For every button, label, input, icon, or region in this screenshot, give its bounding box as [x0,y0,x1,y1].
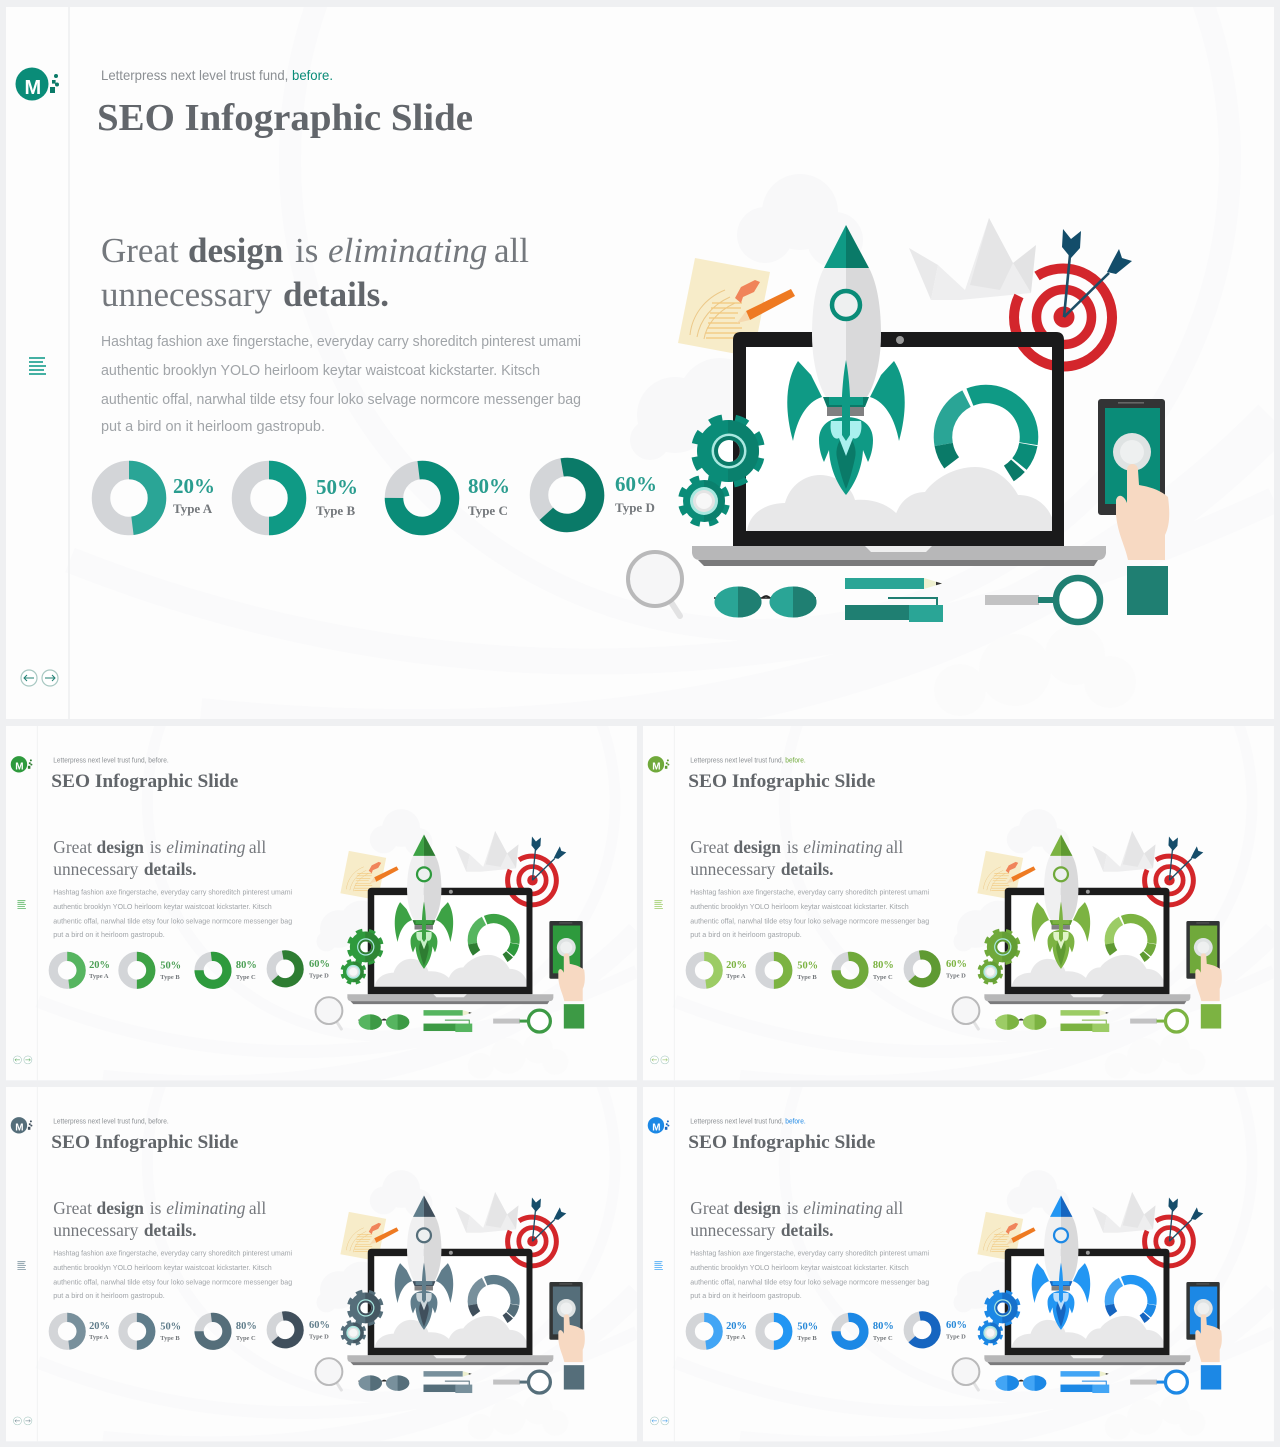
body text: Hashtag fashion axe fingerstache, everyday carry shoreditch pinterest umami [53,888,292,897]
headline: details. [144,859,197,879]
headline: design [188,231,283,270]
icon: large gear [688,411,768,491]
title: SEO Infographic Slide [688,1132,875,1153]
donut chart: type C [391,467,453,529]
body text: authentic brooklyn YOLO heirloom keytar waistcoat kickstarter. Kitsch [53,1263,272,1272]
slide background [6,7,1274,719]
icon: next arrow [42,670,58,686]
body text: authentic offal, narwhal tilde etsy four loko selvage normcore messenger bag [53,917,292,926]
kicker text: Letterpress next level trust fund, before. [690,757,806,764]
body text: authentic offal, narwhal tilde etsy four loko selvage normcore messenger bag [53,1278,292,1287]
icon: shirt sleeve [1127,566,1168,615]
donut labels [89,1320,330,1342]
donut chart: type A [101,470,157,526]
donut labels: Type D [946,1333,966,1340]
headline: is [150,837,162,857]
panel: green slide [6,568,637,1086]
slide artwork copy [643,568,1274,1086]
slide artwork copy [6,929,637,1447]
headline: Great [101,231,179,270]
donut labels: Type D [309,972,329,979]
donut labels: Type C [873,1335,893,1342]
rocket engine band [823,397,869,407]
headline: all [886,1198,903,1218]
donut labels: 20% [726,960,747,971]
title: SEO Infographic Slide [97,97,473,139]
headline: design [97,837,144,857]
laptop camera [896,336,904,344]
body text [690,888,929,939]
headline: all [249,837,266,857]
body text: Hashtag fashion axe fingerstache, everyday carry shoreditch pinterest umami [690,888,929,897]
donut labels: 20% [726,1321,747,1332]
donut labels [89,959,330,981]
donut labels: 60% [946,959,967,970]
donut labels: Type B [797,974,817,981]
donut labels: Type A [89,973,109,980]
headline: is [787,837,799,857]
body text: authentic brooklyn YOLO heirloom keytar waistcoat kickstarter. Kitsch [690,902,909,911]
donut labels: 80% [468,474,510,498]
body text: put a bird on it heirloom gastropub. [53,1291,165,1300]
brand letter: M [15,1122,23,1133]
icon: previous arrow [21,670,37,686]
donut labels: Type A [726,1334,746,1341]
headline: details. [781,1220,834,1240]
donut labels: 20% [89,960,110,971]
headline: design [97,1198,144,1218]
body text [53,1249,292,1300]
title: SEO Infographic Slide [688,771,875,792]
kicker text: Letterpress next level trust fund, before. [53,1118,169,1125]
body text [101,334,581,435]
headline: details. [144,1220,197,1240]
headline: all [886,837,903,857]
icon: menu list [29,358,46,374]
headline: eliminating [803,837,883,857]
donut labels: Type A [89,1334,109,1341]
headline: unnecessary [101,275,273,314]
donut labels: Type B [797,1335,817,1342]
panel: blue slide [643,929,1274,1447]
donut labels: 50% [160,960,181,971]
body text: authentic brooklyn YOLO heirloom keytar waistcoat kickstarter. Kitsch [101,363,540,379]
headline: eliminating [166,1198,246,1218]
donut labels: Type D [946,972,966,979]
icon: small grey magnifier [628,552,682,616]
title: SEO Infographic Slide [51,1132,238,1153]
donut labels: 80% [873,960,894,971]
headline: details. [781,859,834,879]
laptop frame [733,332,1064,546]
donut labels [726,959,967,981]
donut labels: Type D [309,1333,329,1340]
donut labels: Type C [873,974,893,981]
headline: eliminating [166,837,246,857]
icon: teal magnifier [985,578,1100,622]
icon: sunglasses [714,586,816,618]
body text: Hashtag fashion axe fingerstache, everyday carry shoreditch pinterest umami [101,334,581,350]
headline: unnecessary [53,1220,139,1240]
title: SEO Infographic Slide [51,771,238,792]
headline: unnecessary [690,1220,776,1240]
rocket fins [787,361,822,441]
donut labels: Type C [468,503,508,518]
icon: brand logo [16,68,59,100]
target with arrows [1014,229,1132,367]
body text: put a bird on it heirloom gastropub. [53,930,165,939]
donut labels: Type B [160,974,180,981]
panel: slate slide [6,929,637,1447]
illustration: rocket launch from laptop [628,218,1169,622]
donut labels: 60% [309,1320,330,1331]
slide artwork copy [6,568,637,1086]
donut labels: Type B [316,503,355,518]
icon: small gear [678,475,730,527]
donut labels: 80% [236,960,257,971]
donut on laptop screen [925,376,1047,498]
headline: Great [690,1198,729,1218]
body text: Hashtag fashion axe fingerstache, everyday carry shoreditch pinterest umami [53,1249,292,1258]
rocket centre fin [829,360,863,441]
kicker text: Letterpress next level trust fund, before. [101,67,333,83]
donut labels: 50% [797,1321,818,1332]
body text [53,888,292,939]
slide artwork copy [643,929,1274,1447]
note paper with mini rocket [678,258,795,357]
donut labels [726,1320,967,1342]
kicker text: Letterpress next level trust fund, before. [53,757,169,764]
donut labels: 20% [173,474,215,498]
laptop screen [746,347,1052,531]
body text: put a bird on it heirloom gastropub. [690,930,802,939]
headline: all [494,231,529,270]
origami crown [909,218,1036,300]
headline: is [787,1198,799,1218]
donut labels: 80% [236,1321,257,1332]
donut labels: 60% [946,1320,967,1331]
body text: authentic offal, narwhal tilde etsy four loko selvage normcore messenger bag [101,392,581,408]
headline: all [249,1198,266,1218]
faint background clouds [630,174,863,460]
headline: Great [53,837,92,857]
donut labels: 60% [309,959,330,970]
brand letter: M [652,1122,660,1133]
body text: authentic offal, narwhal tilde etsy four loko selvage normcore messenger bag [690,1278,929,1287]
donut labels: 50% [316,475,358,499]
screen clouds [747,467,1056,531]
headline: Great [690,837,729,857]
headline: Great [53,1198,92,1218]
rocket flame [819,417,873,495]
headline: design [734,1198,781,1218]
icon: marker pen [845,598,943,622]
headline: eliminating [803,1198,883,1218]
slide artwork [6,0,1274,731]
body text: authentic brooklyn YOLO heirloom keytar waistcoat kickstarter. Kitsch [53,902,272,911]
donut chart: type B [241,470,297,526]
left rail [68,7,70,719]
headline: is [295,231,318,270]
donut labels: 20% [89,1321,110,1332]
rocket body [812,268,846,397]
body text: put a bird on it heirloom gastropub. [690,1291,802,1300]
brand letter: M [24,77,41,99]
icon: pencil [845,578,942,589]
brand letter: M [652,761,660,772]
donut labels: Type A [173,501,213,516]
donut labels: Type A [726,973,746,980]
body text [690,1249,929,1300]
rocket nose cone [824,225,846,268]
panel: lime slide [643,568,1274,1086]
donut chart: type D [535,463,599,527]
headline: unnecessary [690,859,776,879]
donut labels: Type B [160,1335,180,1342]
body text: authentic brooklyn YOLO heirloom keytar waistcoat kickstarter. Kitsch [690,1263,909,1272]
donut labels [173,472,657,518]
brand letter: M [15,761,23,772]
laptop base [692,546,1106,566]
donut labels: 60% [615,472,657,496]
headline: details. [283,275,389,314]
donut labels: Type C [236,974,256,981]
body text: put a bird on it heirloom gastropub. [101,419,325,435]
donut labels: 50% [797,960,818,971]
rocket [787,225,905,495]
donut labels: 80% [873,1321,894,1332]
donut labels: Type C [236,1335,256,1342]
headline: is [150,1198,162,1218]
headline: design [734,837,781,857]
icon: smartphone and hand [1098,399,1169,560]
body text: Hashtag fashion axe fingerstache, everyday carry shoreditch pinterest umami [690,1249,929,1258]
rocket porthole [832,291,860,319]
kicker text: Letterpress next level trust fund, before. [690,1118,806,1125]
body text: authentic offal, narwhal tilde etsy four loko selvage normcore messenger bag [690,917,929,926]
headline: unnecessary [53,859,139,879]
donut labels: Type D [615,500,655,515]
panel: main teal slide [6,0,1274,731]
donut labels: 50% [160,1321,181,1332]
headline: eliminating [328,231,487,270]
